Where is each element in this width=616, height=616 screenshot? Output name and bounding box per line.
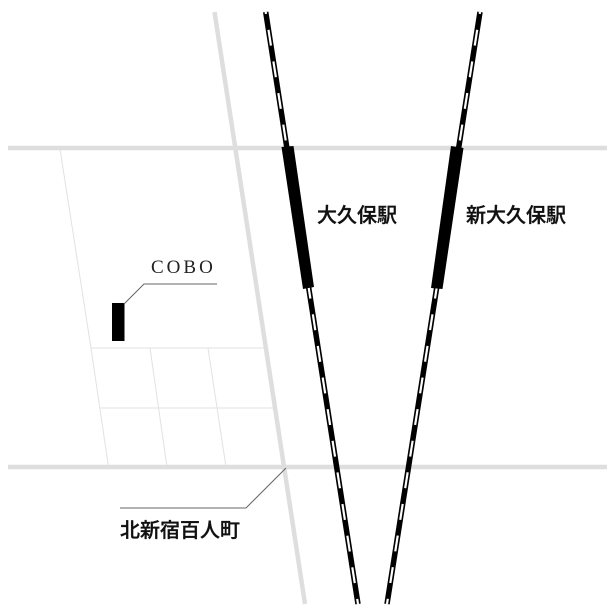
- railway: Shin-Okubo line: [387, 12, 480, 604]
- COBO leader line: [124, 284, 217, 304]
- label: COBO: COBO: [151, 257, 216, 278]
- minor streets: [60, 149, 274, 467]
- station platform: Shin-Okubo: [431, 146, 464, 289]
- station platform: Okubo: [282, 146, 314, 289]
- railway: Okubo line: [266, 12, 358, 604]
- Kita-Shinjuku leader line: [120, 468, 286, 508]
- label: Okubo station: 大久保駅: [317, 204, 397, 227]
- label: Kita-Shinjuku Hyakunincho: 北新宿百人町: [120, 519, 240, 542]
- label: Shin-Okubo station: 新大久保駅: [466, 204, 566, 227]
- COBO marker: [112, 303, 124, 341]
